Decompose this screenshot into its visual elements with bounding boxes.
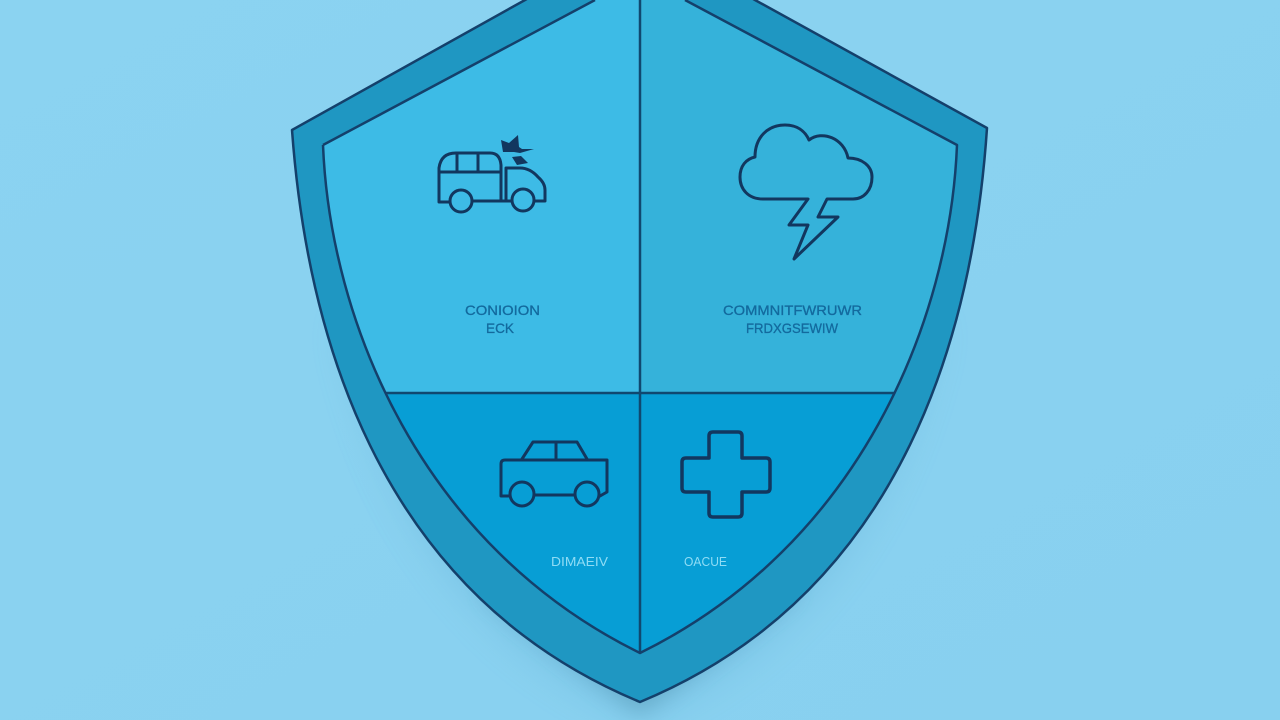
icon: car	[501, 442, 607, 506]
horizontal divider	[386, 392, 894, 394]
icon: car collision	[439, 135, 545, 212]
shield outer band	[292, 0, 987, 702]
shield quadrants	[300, 0, 980, 663]
label: top left: CONIOION	[465, 302, 540, 318]
label: top right	[723, 302, 862, 336]
label: bottom right: OACUE	[684, 554, 727, 569]
shield inner outline	[323, 0, 957, 653]
label: bottom left: DIMAEIV	[551, 554, 608, 569]
label: top left: ECK	[486, 320, 515, 336]
icon: impact burst	[501, 135, 534, 165]
icon: storm cloud	[740, 125, 872, 259]
shield drop shadow	[350, 320, 930, 716]
panel: top left	[300, 0, 640, 393]
panel: top right	[640, 0, 980, 393]
vertical divider	[639, 0, 641, 660]
shield	[292, 0, 987, 702]
icon: medical cross	[682, 432, 770, 517]
label: top right: FRDXGSEWIW	[746, 320, 839, 336]
label: top left	[465, 302, 540, 336]
panel: bottom left	[388, 394, 639, 651]
label: top right: COMMNITFWRUWR	[723, 302, 862, 318]
panel: bottom right	[641, 394, 892, 651]
